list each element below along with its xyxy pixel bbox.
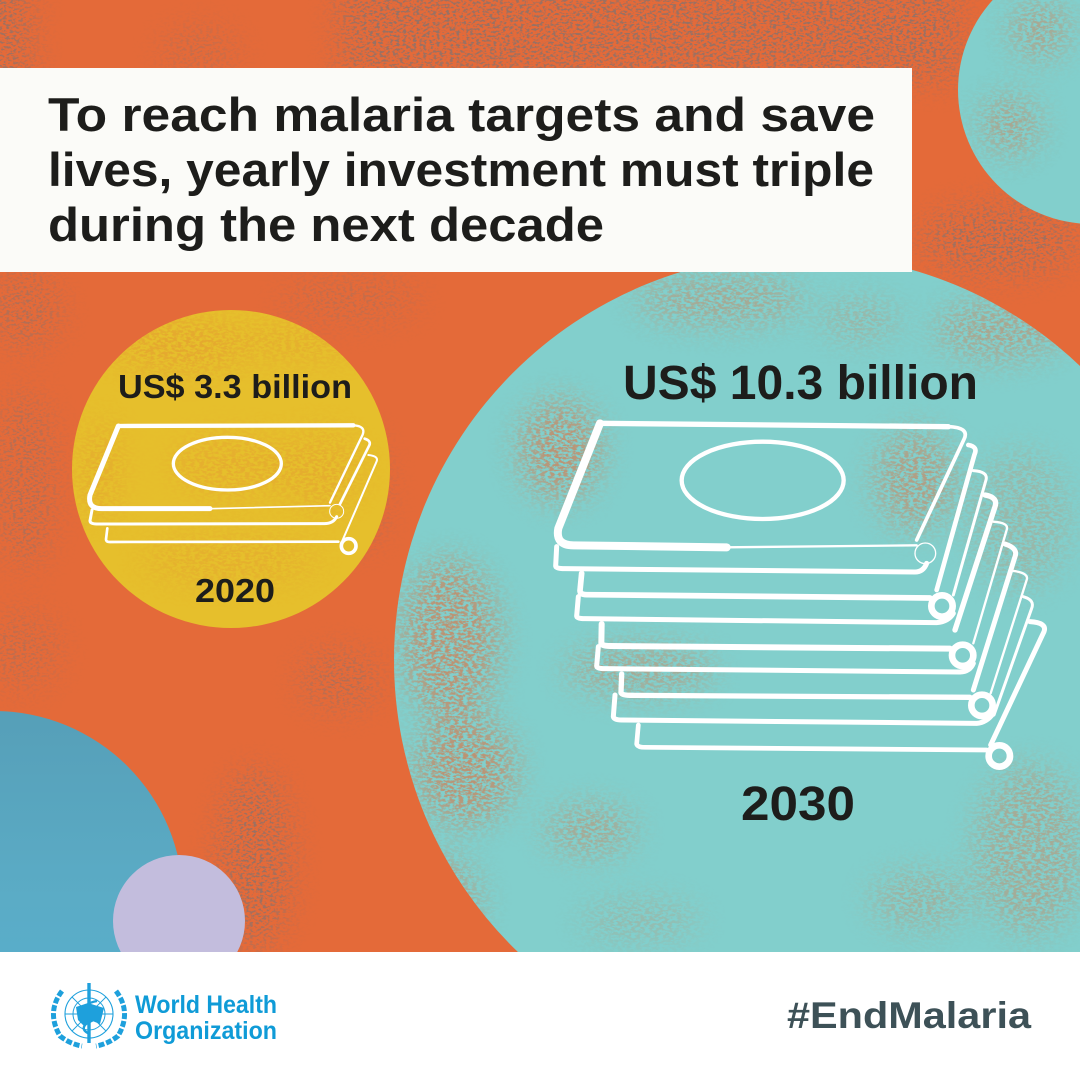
- lavender circle: [113, 855, 245, 987]
- icon: small money stack: [90, 425, 377, 553]
- WHO wordmark: World Health: [135, 991, 277, 1019]
- WHO wordmark: [135, 991, 277, 1045]
- amount 2030: US$ 10.3 billion: [623, 357, 978, 410]
- title text: lives, yearly investment must triple: [48, 143, 874, 196]
- title text: [48, 88, 875, 251]
- icon: WHO emblem: [53, 983, 125, 1046]
- icon: large money stack: [556, 423, 1045, 767]
- hashtag: #EndMalaria: [787, 995, 1031, 1036]
- large teal circle: [394, 270, 1080, 952]
- title panel: [0, 68, 912, 272]
- teal circle top right: [950, 0, 1080, 230]
- title text: To reach malaria targets and save: [48, 88, 875, 141]
- year 2020: 2020: [195, 572, 275, 609]
- amount 2020: US$ 3.3 billion: [118, 368, 352, 405]
- blue circle bottom left: [0, 711, 183, 1080]
- year 2030: 2030: [741, 778, 855, 831]
- footer panel: [0, 952, 1080, 1080]
- WHO wordmark: Organization: [135, 1017, 277, 1045]
- yellow circle: [70, 308, 394, 632]
- title text: during the next decade: [48, 198, 604, 251]
